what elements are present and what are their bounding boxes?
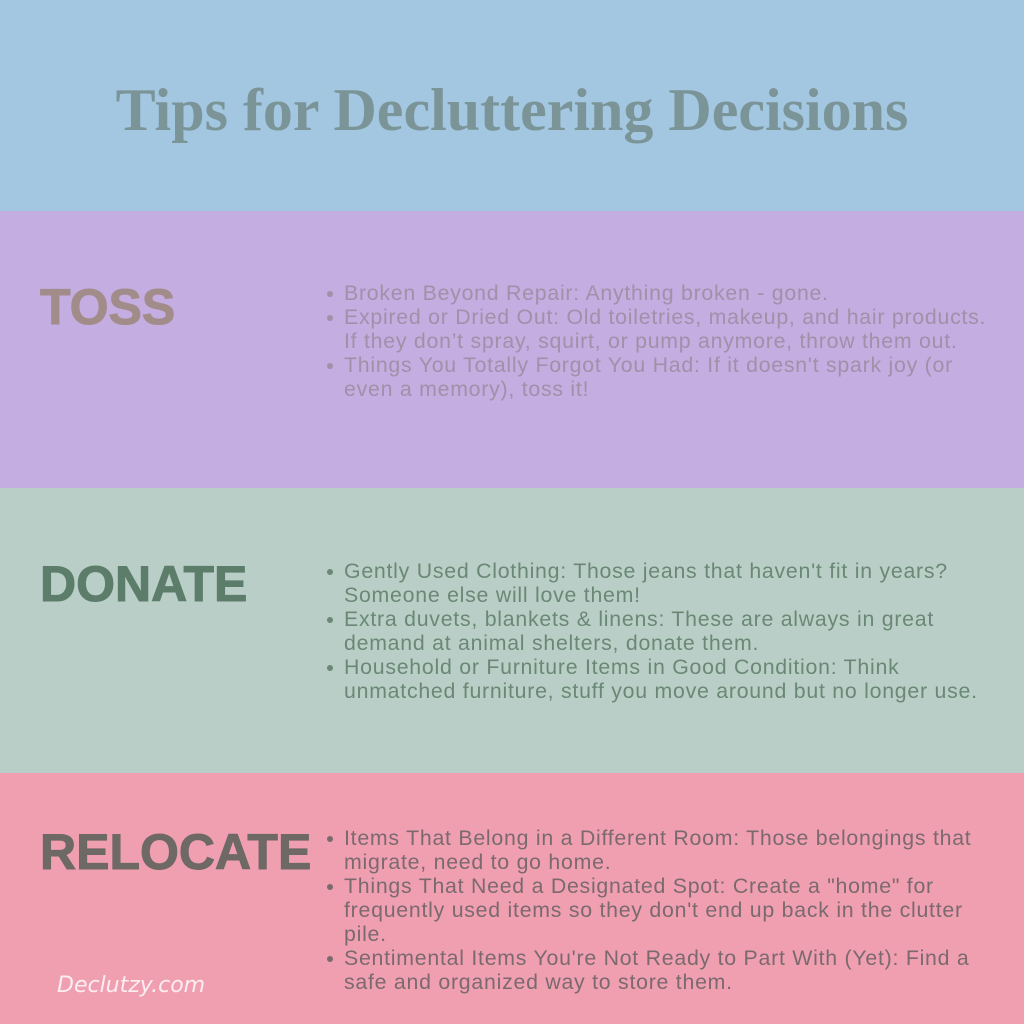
toss list: If they don’t spray, squirt, or pump anymore, throw them out. <box>344 329 958 353</box>
relocate list <box>327 826 971 994</box>
relocate list: safe and organized way to store them. <box>344 970 733 994</box>
brand footer: Declutzy.com <box>57 973 205 998</box>
relocate list: Things That Need a Designated Spot: Create a "home" for <box>344 874 934 898</box>
panel: toss <box>0 211 1024 488</box>
heading: toss: TOSS <box>40 279 175 335</box>
toss list: Things You Totally Forgot You Had: If it doesn't spark joy (or <box>344 353 953 377</box>
relocate list: Items That Belong in a Different Room: Those belongings that <box>344 826 971 850</box>
relocate list: frequently used items so they don't end up back in the clutter <box>344 898 963 922</box>
relocate list: migrate, need to go home. <box>344 850 611 874</box>
heading: relocate: RELOCATE <box>40 824 311 880</box>
panel: relocate <box>0 773 1024 1024</box>
toss list: Expired or Dried Out: Old toiletries, makeup, and hair products. <box>344 305 986 329</box>
toss list: Broken Beyond Repair: Anything broken - gone. <box>344 281 829 305</box>
donate list: demand at animal shelters, donate them. <box>344 631 759 655</box>
donate list: Gently Used Clothing: Those jeans that haven't fit in years? <box>344 559 948 583</box>
relocate list: pile. <box>344 922 387 946</box>
heading: donate: DONATE <box>40 556 247 612</box>
toss list: even a memory), toss it! <box>344 377 589 401</box>
donate list: Household or Furniture Items in Good Condition: Think <box>344 655 899 679</box>
toss list <box>327 281 986 401</box>
panel: donate <box>0 488 1024 773</box>
donate list: unmatched furniture, stuff you move around but no longer use. <box>344 679 978 703</box>
donate list <box>327 559 978 703</box>
donate list: Extra duvets, blankets & linens: These are always in great <box>344 607 934 631</box>
donate list: Someone else will love them! <box>344 583 641 607</box>
title: Tips for Decluttering Decisions <box>116 77 908 143</box>
panel: title band <box>0 0 1024 211</box>
relocate list: Sentimental Items You're Not Ready to Part With (Yet): Find a <box>344 946 970 970</box>
